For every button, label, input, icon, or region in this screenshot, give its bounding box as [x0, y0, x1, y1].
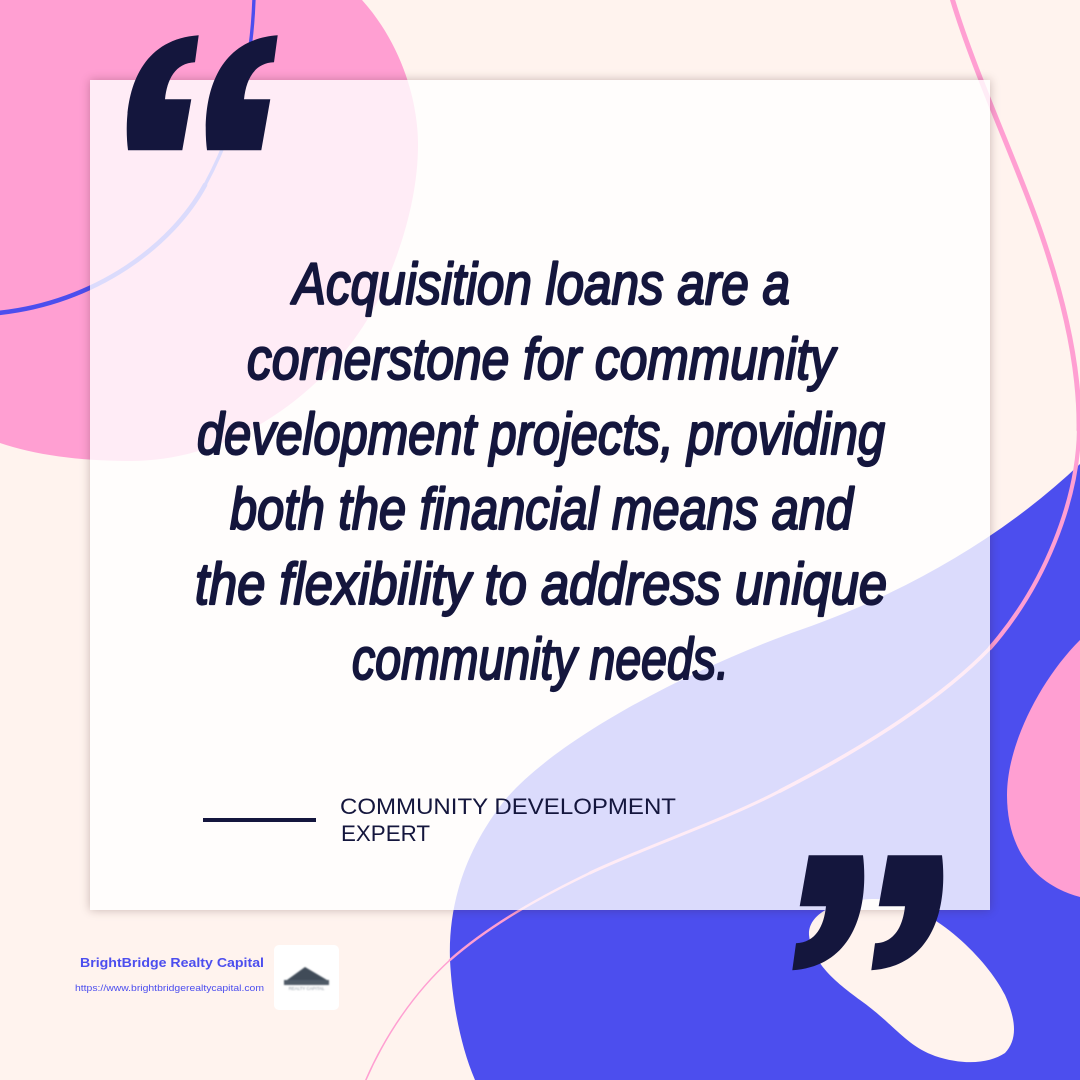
quote text: both the financial means and	[230, 477, 854, 542]
quote text	[195, 252, 887, 692]
attribution text: EXPERT	[341, 821, 430, 846]
quote text: development projects, providing	[197, 402, 885, 467]
pink blob right edge	[1007, 640, 1080, 897]
pink blob top left	[0, 0, 418, 461]
quote text: cornerstone for community	[247, 327, 838, 392]
icon: logo roof mark: REALTY CAPITAL	[289, 986, 325, 991]
brand name: BrightBridge Realty Capital	[80, 955, 264, 970]
opening quotation mark	[127, 35, 278, 150]
attribution text	[340, 794, 676, 846]
quote card panel	[90, 80, 990, 910]
quote text: community needs.	[352, 627, 729, 692]
icon: logo roof mark	[284, 967, 329, 991]
blue curved line top left	[0, 0, 254, 313]
quote text: the flexibility to address unique	[195, 552, 887, 617]
quote text: Acquisition loans are a	[290, 252, 790, 317]
logo tile	[274, 945, 339, 1010]
closing quotation mark	[792, 855, 943, 970]
cream blob bottom right	[809, 899, 1014, 1062]
attribution text: COMMUNITY DEVELOPMENT	[340, 794, 676, 819]
blue blob bottom right	[450, 464, 1080, 1080]
pink curved line right, tapering	[365, 0, 1079, 1080]
brand url: https://www.brightbridgerealtycapital.com	[75, 982, 264, 993]
attribution rule	[203, 818, 316, 822]
